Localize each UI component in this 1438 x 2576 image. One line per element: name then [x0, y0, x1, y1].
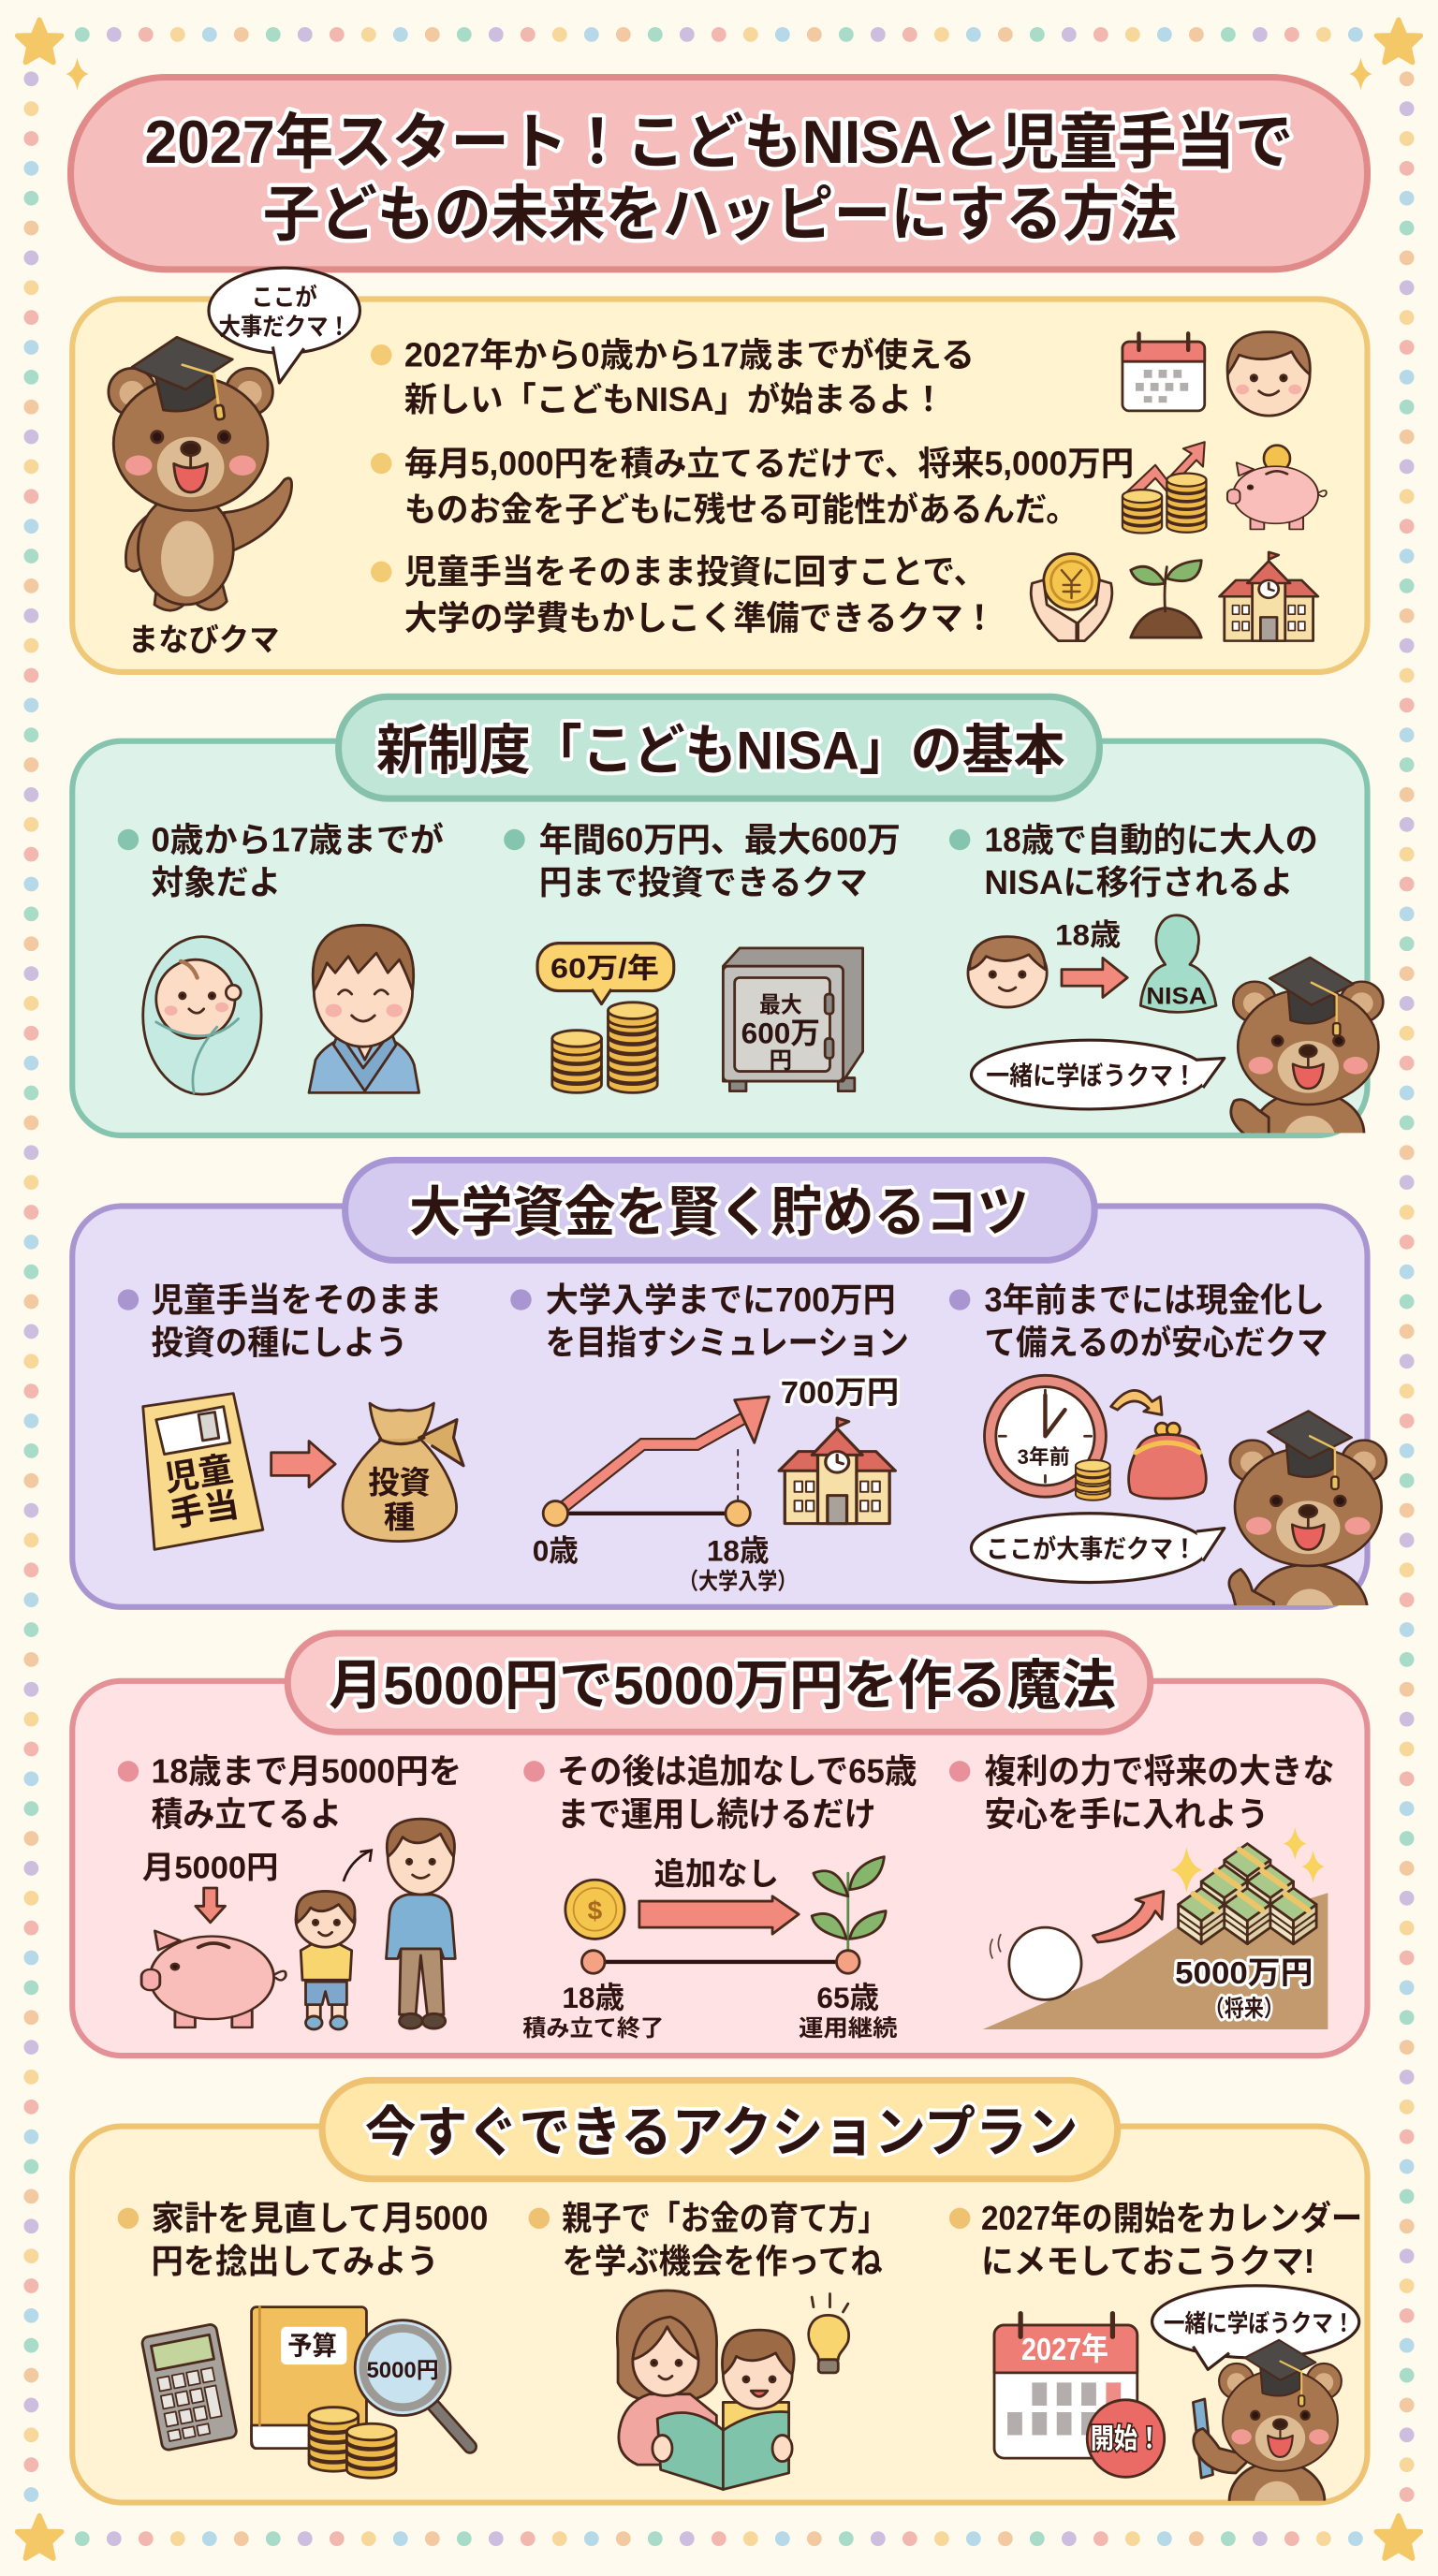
bullet text 1 — [404, 335, 975, 418]
icon: coin stacks — [309, 2408, 396, 2478]
bullet dots — [118, 829, 970, 850]
bullet text 1: 新しい「こどもNISA」が始まるよ！ — [404, 380, 945, 418]
icon: dollar coin — [565, 1880, 624, 1939]
icon: sprout — [812, 1857, 886, 1955]
column 3 text — [985, 820, 1318, 901]
icon: calendar 2027: 2027年 — [1021, 2333, 1108, 2367]
heading: 大学資金を賢く貯めるコツ — [409, 1183, 1029, 1243]
title text — [144, 108, 1294, 248]
icon: coin purse — [1129, 1423, 1206, 1499]
label: age 0: 0歳 — [533, 1534, 579, 1568]
column 2 text: 円まで投資できるクマ — [539, 863, 868, 901]
curved arrow — [1111, 1390, 1162, 1414]
icon: piggy bank — [1227, 446, 1327, 529]
column 2 text: 親子で「お金の育て方」 — [562, 2199, 888, 2237]
icon: safe — [723, 948, 863, 1091]
label: age 18: 積み立て終了 — [522, 2015, 664, 2042]
column 1 text — [151, 1281, 442, 1361]
icon: safe: 600万 — [741, 1017, 820, 1050]
label: 50 million yen future: 5000万円 — [1175, 1956, 1313, 1991]
label: age 65: 65歳 — [816, 1981, 879, 2014]
column 3 text: 2027年の開始をカレンダー — [981, 2199, 1362, 2237]
column 2 text: その後は追加なしで65歳 — [557, 1752, 917, 1791]
speech bubble — [971, 1040, 1225, 1109]
chart: simulation line — [543, 1397, 770, 1526]
label: 50 million yen future: （将来） — [1205, 1996, 1284, 2022]
label: age 18: 18歳 — [1055, 917, 1121, 951]
column 2 text — [557, 1752, 917, 1833]
label: no more contributions: 追加なし — [654, 1857, 779, 1892]
icon: child face — [1227, 332, 1310, 416]
icon: growth arrow and coins — [1123, 442, 1206, 533]
column 2 text — [546, 1281, 909, 1361]
arrow — [1062, 958, 1127, 998]
icon: calendar 2027 — [994, 2314, 1137, 2458]
heading — [339, 696, 1099, 798]
bullet text 2: 毎月5,000円を積み立てるだけで、将来5,000万円 — [404, 444, 1134, 482]
icon: piggy bank — [141, 1931, 286, 2027]
bullet dots — [118, 1289, 970, 1310]
label: age 18 college entry — [679, 1534, 797, 1595]
icon: NISA adult — [1140, 915, 1216, 1012]
bullet text 2 — [404, 444, 1134, 528]
label: age 18 college entry: （大学入学） — [679, 1569, 797, 1595]
icon: money bag: 投資 — [368, 1467, 431, 1501]
column 2 text: を目指すシミュレーション — [546, 1323, 909, 1361]
illustration: child — [296, 1892, 355, 2029]
curved arrow — [1093, 1892, 1164, 1942]
callout: 600,000 yen per year: 60万/年 — [550, 953, 659, 984]
column 2 text — [539, 820, 901, 901]
column 3 text: 3年前までには現金化し — [985, 1281, 1325, 1319]
panel: college fund tips — [72, 1160, 1387, 1656]
bullet text 2: ものお金を子どもに残せる可能性があるんだ。 — [404, 490, 1078, 528]
title banner — [70, 78, 1368, 270]
label: age 18: 18歳 — [562, 1981, 624, 2014]
heading — [322, 2080, 1118, 2179]
column 1 text — [151, 820, 444, 901]
column 3 text: 複利の力で将来の大きな — [985, 1752, 1334, 1791]
icon: magnifying glass: 5000円 — [366, 2359, 439, 2383]
mascot name: まなびクマ — [128, 623, 279, 658]
speech bubble — [1152, 2286, 1359, 2369]
label: 5000 yen monthly: 月5000円 — [142, 1851, 279, 1885]
column 3 text — [981, 2199, 1362, 2280]
mascot bear thumbs up — [1227, 1410, 1387, 1605]
illustration: hill — [983, 1893, 1328, 2029]
column 3 text: 18歳で自動的に大人の — [985, 820, 1318, 858]
icon: money bag — [343, 1403, 463, 1542]
mascot: manabi bear — [109, 330, 292, 610]
illustration: adult — [387, 1819, 455, 2028]
icon: money bag: 種 — [384, 1501, 415, 1536]
title text: 子どもの未来をハッピーにする方法 — [263, 180, 1177, 248]
icon: budget book: 予算 — [287, 2332, 337, 2361]
icon: school — [779, 1418, 895, 1524]
column 3 text: て備えるのが安心だクマ — [985, 1323, 1328, 1361]
bullet text 3: 大学の学費もかしこく準備できるクマ！ — [404, 598, 996, 637]
panel: 5000 yen magic — [72, 1633, 1368, 2056]
icon: hands and yen coin — [1031, 554, 1112, 641]
icon: magnifying glass — [355, 2320, 470, 2447]
bullet text 3: 児童手当をそのまま投資に回すことで、 — [404, 552, 986, 591]
column 1 text: 家計を見直して月5000 — [151, 2199, 488, 2237]
icon: clock — [985, 1375, 1106, 1497]
column 2 text: まで運用し続けるだけ — [557, 1794, 876, 1833]
illustration: parent and child reading — [617, 2291, 794, 2489]
speech bubble: 一緒に学ぼうクマ！ — [1164, 2309, 1354, 2337]
panel: action plan — [72, 2080, 1368, 2540]
icon: coin stacks — [552, 1003, 657, 1092]
label: age 65 — [799, 1981, 898, 2042]
heading — [345, 1160, 1094, 1260]
column 3 text: NISAに移行されるよ — [985, 863, 1294, 901]
icon: envelope: 児童 — [162, 1450, 236, 1499]
panel: introduction — [72, 268, 1368, 672]
label: age 18 college entry: 18歳 — [707, 1534, 770, 1568]
bullet text 1: 2027年から0歳から17歳までが使える — [404, 335, 975, 373]
icon: dollar coin: $ — [588, 1895, 603, 1925]
column 1 text: 投資の種にしよう — [151, 1323, 407, 1361]
column 1 text — [151, 1752, 462, 1833]
label: age 65: 運用継続 — [799, 2015, 898, 2042]
speech bubble: ここが — [252, 284, 317, 312]
column 1 text: 18歳まで月5000円を — [151, 1752, 462, 1791]
label: 50 million yen future — [1175, 1956, 1313, 2022]
panel: kodomo NISA basics — [72, 696, 1383, 1177]
icon: envelope — [143, 1394, 263, 1549]
bullet dots — [118, 1761, 970, 1782]
callout: 600,000 yen per year — [537, 944, 674, 1004]
arrow — [639, 1896, 799, 1934]
icon: envelope: 手当 — [168, 1486, 242, 1534]
small growth arrow — [344, 1851, 372, 1881]
mascot bear with pencil — [1192, 2338, 1343, 2501]
bullet dots — [371, 344, 391, 582]
column 1 text: 対象だよ — [151, 863, 281, 901]
column 2 text: を学ぶ機会を作ってね — [562, 2242, 883, 2280]
column 2 text: 大学入学までに700万円 — [546, 1281, 896, 1319]
icon: NISA adult: NISA — [1146, 985, 1208, 1010]
label: 7 million yen: 700万円 — [781, 1376, 899, 1411]
icon: safe: 最大 — [759, 992, 802, 1017]
column 1 text: 児童手当をそのまま — [151, 1281, 442, 1319]
column 3 text — [985, 1281, 1328, 1361]
badge: start — [1087, 2400, 1165, 2477]
icon: coin stack — [1076, 1460, 1110, 1500]
bullet text 3 — [404, 552, 996, 637]
speech bubble — [971, 1514, 1225, 1582]
illustration: pile of money — [1170, 1827, 1325, 1944]
column 1 text: 円を捻出してみよう — [151, 2242, 439, 2280]
column 3 text: にメモしておこうクマ! — [981, 2242, 1314, 2280]
icon: light bulb — [809, 2294, 849, 2373]
icon: safe: 円 — [770, 1048, 792, 1074]
timeline — [581, 1951, 859, 1973]
speech bubble: 大事だクマ！ — [218, 313, 350, 341]
illustration: snowball — [990, 1927, 1081, 1999]
title text: 2027年スタート！こどもNISAと児童手当で — [144, 108, 1294, 176]
speech bubble: ここが大事だクマ！ — [986, 1534, 1196, 1563]
arrow — [271, 1442, 335, 1487]
icon: school — [1220, 552, 1318, 641]
speech bubble: 一緒に学ぼうクマ！ — [986, 1061, 1196, 1090]
speech bubble — [209, 268, 360, 383]
column 2 text — [562, 2199, 888, 2280]
column 1 text — [151, 2199, 488, 2280]
icon: child face — [968, 937, 1047, 1007]
column 2 text: 年間60万円、最大600万 — [539, 820, 901, 858]
illustration: older child in hoodie — [309, 925, 419, 1092]
icon: budget book — [252, 2307, 366, 2449]
icon: clock: 3年前 — [1018, 1445, 1070, 1469]
heading: 今すぐできるアクションプラン — [365, 2103, 1078, 2163]
arrow down — [196, 1888, 225, 1923]
illustration: swaddled baby — [143, 937, 261, 1094]
bullet dots — [118, 2208, 970, 2229]
icon: calculator — [141, 2323, 238, 2451]
label: age 18 — [522, 1981, 664, 2042]
column 3 text — [985, 1752, 1334, 1833]
column 1 text: 積み立てるよ — [151, 1794, 342, 1833]
icon: sprout — [1131, 561, 1201, 637]
heading: 新制度「こどもNISA」の基本 — [376, 722, 1065, 782]
heading: 月5000円で5000万円を作る魔法 — [329, 1656, 1116, 1716]
icon: calendar — [1123, 333, 1205, 411]
column 1 text: 0歳から17歳までが — [151, 820, 444, 858]
mascot bear waving — [1229, 957, 1385, 1133]
badge: start: 開始！ — [1091, 2424, 1161, 2455]
heading — [287, 1633, 1151, 1732]
column 3 text: 安心を手に入れよう — [985, 1794, 1269, 1833]
